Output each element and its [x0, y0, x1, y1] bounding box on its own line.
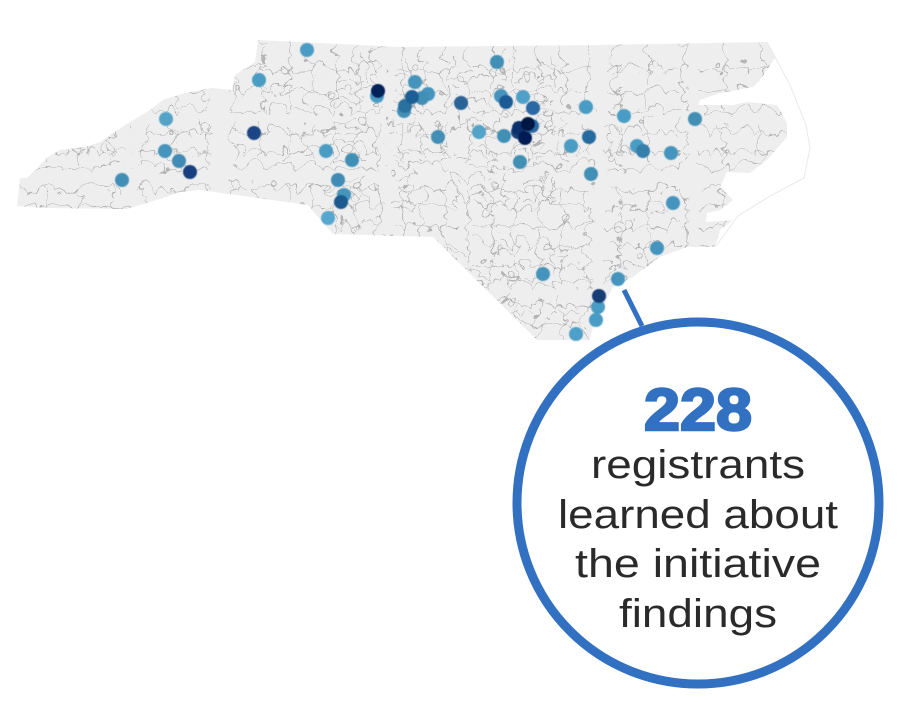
caption text: learned about — [558, 493, 838, 537]
callout circle — [517, 322, 879, 684]
caption text — [558, 443, 838, 636]
caption text: registrants — [591, 443, 805, 487]
figure: 228: 228 — [644, 377, 752, 443]
caption text: findings — [619, 592, 777, 636]
location dots — [115, 43, 702, 341]
caption text: the initiative — [575, 542, 821, 586]
callout connector line — [624, 290, 642, 326]
zip code boundary lines — [19, 40, 787, 340]
outer banks barrier islands — [716, 42, 810, 246]
circle outline — [517, 322, 879, 684]
state land area — [17, 40, 787, 340]
map: North Carolina zip code areas — [0, 30, 810, 350]
